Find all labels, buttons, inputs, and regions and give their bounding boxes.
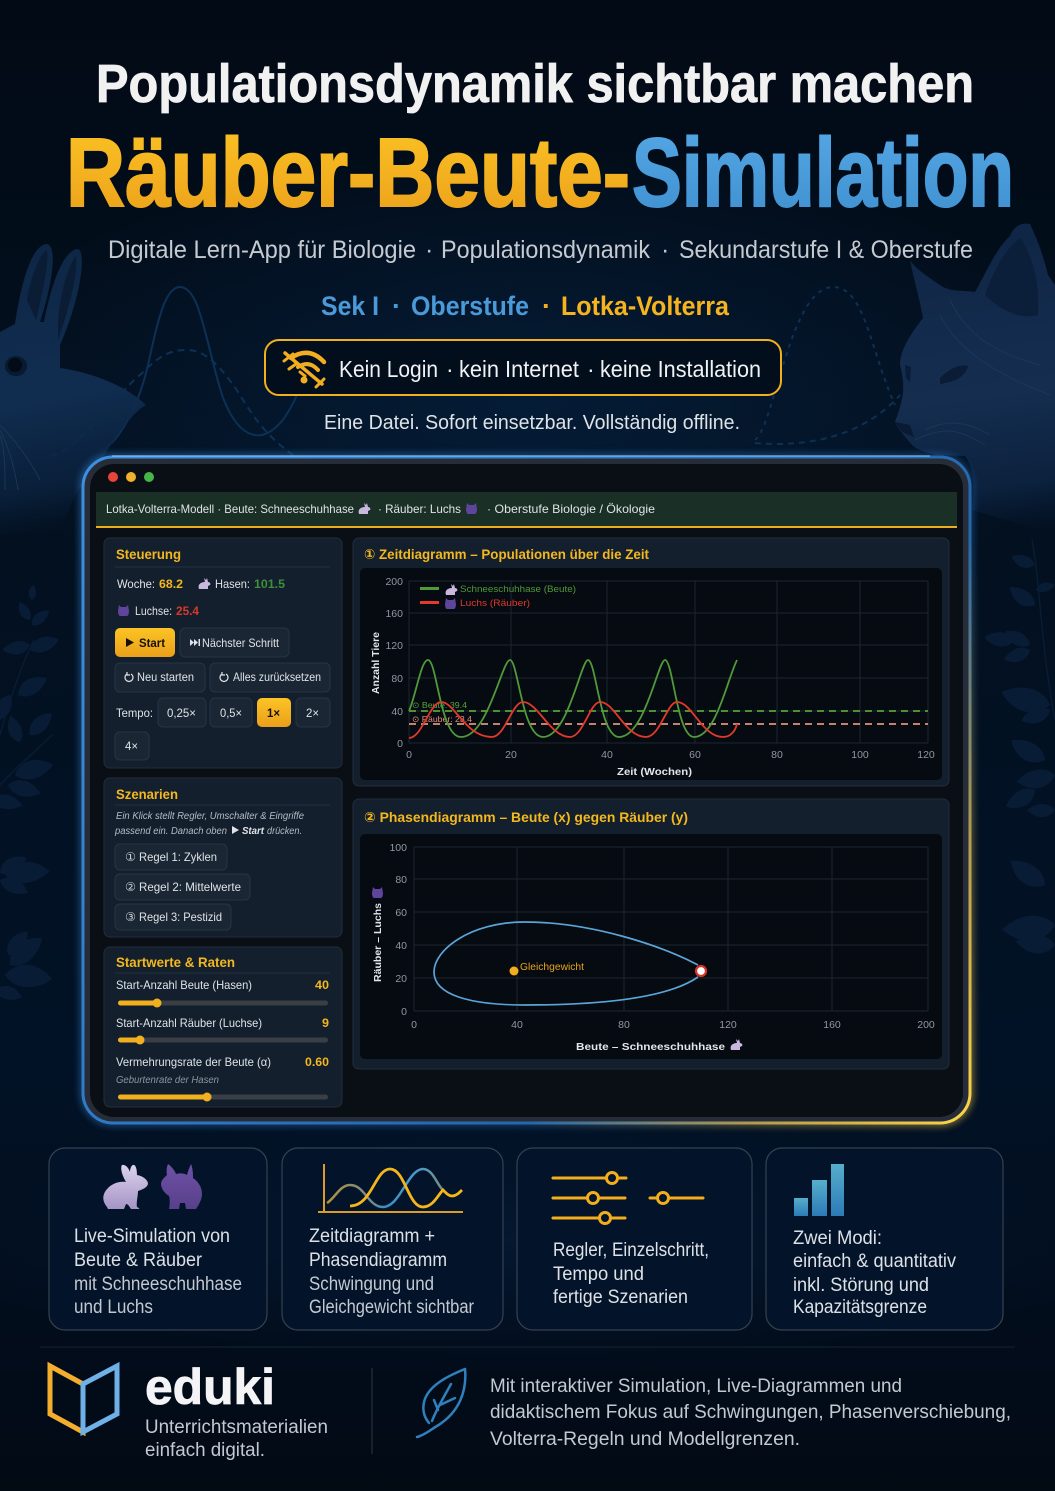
axis ticks: 0 bbox=[397, 738, 403, 750]
slider: Beute: 40 bbox=[315, 978, 329, 992]
icon: sliders bbox=[553, 1172, 703, 1224]
pill: offline note: keine Installation bbox=[600, 356, 761, 382]
panel: Szenarien: Szenarien bbox=[116, 786, 178, 802]
axis ticks: 200 bbox=[917, 1019, 935, 1031]
axis ticks: 20 bbox=[505, 749, 517, 761]
tempo controls: 0,25× bbox=[167, 706, 196, 720]
card text: einfach & quantitativ bbox=[793, 1251, 956, 1272]
axis ticks: 40 bbox=[395, 940, 407, 952]
current state marker bbox=[696, 966, 706, 976]
equilibrium lines: ⊙ Beute: 39.4 bbox=[412, 700, 467, 710]
panel: Phasendiagramm: ② Phasendiagramm – Beute (x) gegen Räuber (y) bbox=[364, 809, 688, 825]
axis ticks: 100 bbox=[389, 842, 407, 854]
phase orbit bbox=[434, 922, 698, 1005]
closing text: Volterra-Regeln und Modellgrenzen. bbox=[490, 1429, 800, 1450]
card text: Phasendiagramm bbox=[309, 1250, 447, 1271]
closing text bbox=[490, 1376, 1011, 1450]
pill: offline note: · bbox=[446, 356, 454, 382]
card text: fertige Szenarien bbox=[553, 1287, 688, 1308]
subtitle: Sekundarstufe I & Oberstufe bbox=[679, 236, 973, 264]
axis ticks: 120 bbox=[719, 1019, 737, 1031]
card text: Zwei Modi: bbox=[793, 1228, 882, 1249]
panel: Steuerung: Hasen: bbox=[215, 577, 250, 591]
tags bbox=[321, 291, 730, 321]
background: hare silhouette bbox=[0, 244, 146, 535]
legend bbox=[420, 584, 576, 609]
button: Neu starten bbox=[115, 663, 205, 692]
panel: Zeitdiagramm: ① Zeitdiagramm – Populationen über die Zeit bbox=[364, 546, 649, 562]
scenario buttons: ① bbox=[125, 850, 136, 864]
tempo controls bbox=[115, 698, 330, 760]
tags: Oberstufe bbox=[411, 291, 529, 321]
card text bbox=[74, 1226, 242, 1318]
tempo controls: 0,5× bbox=[220, 706, 242, 720]
axis ticks: 120 bbox=[917, 749, 935, 761]
tags: · bbox=[542, 291, 551, 321]
button: Nächster Schritt bbox=[180, 628, 289, 657]
slider: Vermehrungsrate bbox=[116, 1055, 329, 1102]
panel: Startwerte und Raten bbox=[104, 947, 342, 1107]
card: Diagramme bbox=[282, 1148, 503, 1330]
card text: inkl. Störung und bbox=[793, 1275, 929, 1296]
tags: Lotka-Volterra bbox=[561, 291, 730, 321]
panel: Steuerung: 68.2 bbox=[159, 577, 183, 591]
card text: Kapazitätsgrenze bbox=[793, 1297, 927, 1318]
button: Neu starten: Neu starten bbox=[137, 670, 194, 684]
scenario buttons: Regel 2: Mittelwerte bbox=[139, 880, 241, 894]
pill: offline note bbox=[265, 340, 781, 395]
button: Alles zurücksetzen: Alles zurücksetzen bbox=[233, 670, 321, 684]
subtitle: Populationsdynamik bbox=[441, 236, 650, 264]
scenario buttons: Regel 3: Pestizid bbox=[139, 910, 222, 924]
device frame: app window bbox=[83, 456, 970, 1123]
card text: Zeitdiagramm + bbox=[309, 1226, 435, 1247]
panel: Startwerte und Raten: Startwerte & Raten bbox=[116, 954, 235, 970]
panel: Steuerung: Woche: bbox=[117, 577, 155, 591]
axis ticks: 40 bbox=[601, 749, 613, 761]
header bar: Lotka-Volterra-Modell · Beute: Schneeschuhhase bbox=[106, 502, 354, 516]
axis ticks: 80 bbox=[618, 1019, 630, 1031]
curve: Luchs bbox=[409, 702, 737, 738]
card: Live-Simulation bbox=[49, 1148, 267, 1330]
slider: Räuber bbox=[116, 1016, 329, 1044]
icon: open book bbox=[50, 1366, 117, 1432]
hint text: Ein Klick stellt Regler, Umschalter & Eingriffe bbox=[116, 811, 304, 822]
axis ticks: 80 bbox=[771, 749, 783, 761]
hint text: Start bbox=[242, 826, 265, 837]
slider: Vermehrungsrate: Geburtenrate der Hasen bbox=[116, 1075, 219, 1086]
axis ticks bbox=[385, 576, 935, 761]
axis titles: Räuber – Luchs bbox=[372, 903, 384, 982]
tagline: Eine Datei. Sofort einsetzbar. Vollständig offline. bbox=[324, 412, 740, 434]
panel: Steuerung: Luchse: bbox=[135, 604, 172, 618]
equilibrium point: Gleichgewicht bbox=[520, 961, 584, 973]
panel: Szenarien bbox=[104, 778, 342, 937]
equilibrium lines bbox=[409, 700, 928, 724]
axis ticks: 120 bbox=[385, 640, 403, 652]
panel: Steuerung: Steuerung bbox=[116, 546, 181, 562]
background: lynx silhouette bbox=[895, 224, 1055, 535]
axis ticks: 0 bbox=[406, 749, 412, 761]
title line 1: Populationsdynamik sichtbar machen bbox=[96, 54, 974, 114]
button: Start: Start bbox=[139, 636, 165, 650]
card: Regler bbox=[517, 1148, 752, 1330]
header bar bbox=[96, 492, 957, 528]
card: Zwei Modi bbox=[766, 1148, 1003, 1330]
panel: Steuerung: 101.5 bbox=[254, 577, 285, 591]
tempo controls: Tempo: bbox=[116, 706, 153, 720]
panel: Zeitdiagramm bbox=[353, 538, 949, 786]
button: Alles zurücksetzen bbox=[210, 663, 330, 692]
card text: mit Schneeschuhhase bbox=[74, 1274, 242, 1295]
background: foliage bbox=[0, 540, 1055, 1003]
tempo controls: 1× bbox=[267, 706, 280, 720]
slider: Beute: Start-Anzahl Beute (Hasen) bbox=[116, 978, 252, 992]
axis ticks: 160 bbox=[823, 1019, 841, 1031]
card text: Beute & Räuber bbox=[74, 1250, 203, 1271]
hint text: passend ein. Danach oben bbox=[114, 826, 227, 837]
pill: offline note: kein Internet bbox=[459, 356, 580, 382]
button: Nächster Schritt: Nächster Schritt bbox=[202, 636, 280, 650]
panel: Phasendiagramm bbox=[353, 799, 949, 1069]
closing text: Mit interaktiver Simulation, Live-Diagrammen und bbox=[490, 1376, 902, 1397]
closing text: didaktischem Fokus auf Schwingungen, Phasenverschiebung, bbox=[490, 1402, 1011, 1423]
card text: Tempo und bbox=[553, 1264, 644, 1285]
subtitle bbox=[108, 236, 973, 264]
axis ticks: 160 bbox=[385, 608, 403, 620]
axis titles: Beute – Schneeschuhhase bbox=[576, 1041, 725, 1053]
background: wave curves bbox=[50, 287, 900, 460]
logo: eduki: einfach digital. bbox=[145, 1440, 265, 1461]
card text: Live-Simulation von bbox=[74, 1226, 230, 1247]
icon: lynx bbox=[161, 1164, 202, 1209]
icon: hare bbox=[103, 1165, 148, 1209]
tempo controls: 4× bbox=[125, 739, 138, 753]
curve: Hase bbox=[409, 660, 737, 737]
axis ticks: 200 bbox=[385, 576, 403, 588]
icon: leaf bbox=[417, 1369, 465, 1437]
tempo controls: 2× bbox=[306, 706, 319, 720]
axis titles: Zeit (Wochen) bbox=[617, 766, 692, 778]
axis titles bbox=[372, 887, 742, 1053]
axis ticks: 20 bbox=[395, 973, 407, 985]
axis ticks: 0 bbox=[411, 1019, 417, 1031]
hint text: drücken. bbox=[267, 826, 302, 837]
icon: bar chart bbox=[794, 1164, 844, 1216]
scenario buttons bbox=[115, 844, 250, 930]
scenario buttons: ② bbox=[125, 880, 136, 894]
scenario buttons: ③ bbox=[125, 910, 136, 924]
subtitle: · bbox=[425, 236, 433, 264]
card text: Gleichgewicht sichtbar bbox=[309, 1297, 475, 1318]
scenario buttons: Regel 1: Zyklen bbox=[139, 850, 217, 864]
card text bbox=[309, 1226, 475, 1318]
tags: · bbox=[392, 291, 401, 321]
axis ticks: 0 bbox=[401, 1006, 407, 1018]
axis titles: Anzahl Tiere bbox=[370, 632, 382, 694]
hint text bbox=[114, 811, 304, 837]
axis titles bbox=[370, 632, 692, 778]
slider: Vermehrungsrate: 0.60 bbox=[305, 1055, 329, 1069]
subtitle: · bbox=[661, 236, 669, 264]
panel: Steuerung: 25.4 bbox=[176, 604, 199, 618]
axis ticks: 60 bbox=[395, 907, 407, 919]
slider: Räuber: Start-Anzahl Räuber (Luchse) bbox=[116, 1016, 262, 1030]
tags: Sek I bbox=[321, 291, 379, 321]
slider: Räuber: 9 bbox=[322, 1016, 329, 1030]
pill: offline note: Kein Login bbox=[339, 356, 438, 382]
card text bbox=[793, 1228, 956, 1318]
card text: und Luchs bbox=[74, 1297, 153, 1318]
slider: Vermehrungsrate: Vermehrungsrate der Beute (α) bbox=[116, 1055, 271, 1069]
window dots bbox=[108, 472, 154, 482]
logo: eduki bbox=[50, 1359, 328, 1461]
axis ticks: 80 bbox=[395, 874, 407, 886]
axis ticks bbox=[389, 842, 935, 1031]
logo: eduki: Unterrichtsmaterialien bbox=[145, 1417, 328, 1438]
panel: Steuerung bbox=[104, 538, 342, 768]
card text: Schwingung und bbox=[309, 1274, 434, 1295]
button: Start bbox=[115, 628, 175, 657]
legend: Luchs (Räuber) bbox=[460, 598, 530, 609]
icon: wifi off bbox=[284, 353, 324, 387]
axis ticks: 40 bbox=[511, 1019, 523, 1031]
pill: offline note: · bbox=[587, 356, 595, 382]
axis ticks: 60 bbox=[689, 749, 701, 761]
equilibrium lines: ⊙ Räuber: 23.4 bbox=[412, 714, 472, 724]
header bar: · Oberstufe Biologie / Ökologie bbox=[487, 502, 655, 516]
legend: Schneeschuhhase (Beute) bbox=[460, 584, 576, 595]
subtitle: Digitale Lern-App für Biologie bbox=[108, 236, 416, 264]
title line 2: Räuber-Beute- bbox=[66, 118, 630, 227]
card text bbox=[553, 1240, 709, 1308]
logo: eduki: eduki bbox=[145, 1359, 275, 1415]
header bar: · Räuber: Luchs bbox=[378, 502, 461, 516]
axis ticks: 40 bbox=[391, 706, 403, 718]
slider: Beute bbox=[116, 978, 329, 1008]
axis ticks: 100 bbox=[851, 749, 869, 761]
icon: line chart bbox=[318, 1164, 463, 1212]
card text: Regler, Einzelschritt, bbox=[553, 1240, 709, 1261]
axis ticks: 80 bbox=[391, 673, 403, 685]
